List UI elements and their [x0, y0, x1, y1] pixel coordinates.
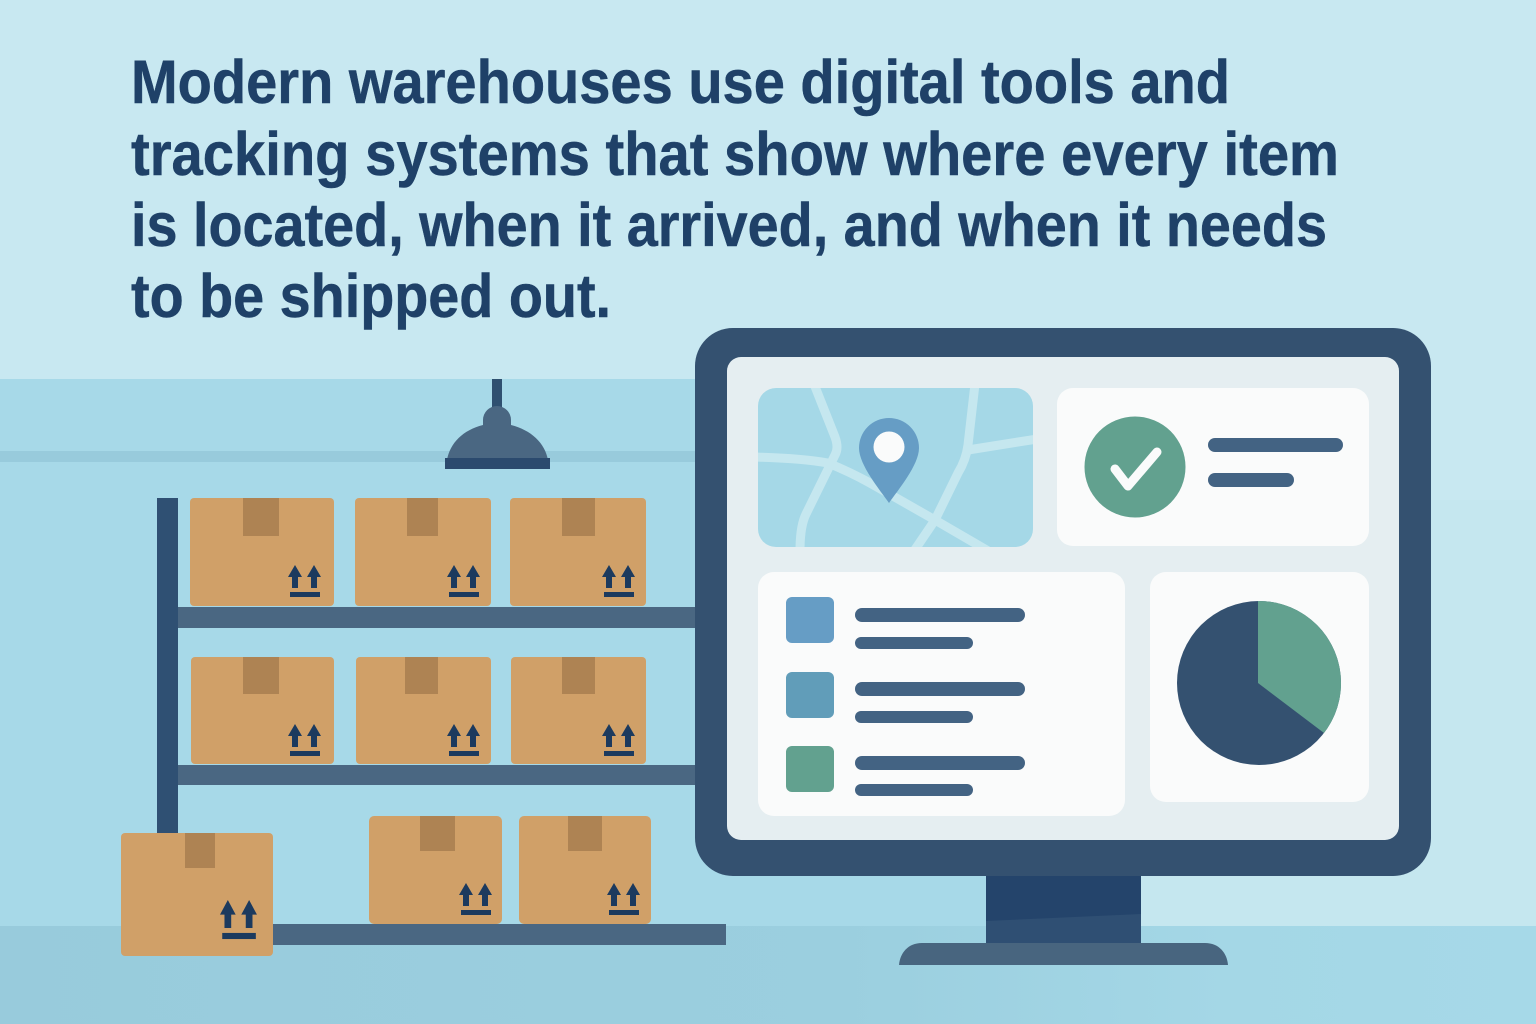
icon: check mark [1084, 416, 1186, 518]
icon: ceiling lamp [445, 379, 550, 469]
status lines [1208, 438, 1343, 487]
title: is located, when it arrived, and when it needs [131, 191, 1327, 259]
monitor stand [899, 874, 1228, 965]
box row 3, box 1 [369, 816, 502, 924]
list row 3 [786, 746, 1025, 796]
box row 2, box 1 [191, 657, 334, 764]
title: Modern warehouses use digital tools and [131, 48, 1230, 116]
list row 1 [786, 597, 1025, 649]
monitor [695, 328, 1431, 876]
box row 2, box 2 [356, 657, 491, 764]
box row 1, box 2 [355, 498, 491, 606]
title: tracking systems that show where every item [131, 120, 1339, 188]
title [131, 48, 1339, 330]
list row 2 [786, 672, 1025, 723]
inventory list card [758, 572, 1125, 816]
box row 2, box 3 [511, 657, 646, 764]
box row 1, box 1 [190, 498, 334, 606]
map panel [754, 384, 1037, 552]
status card [1057, 388, 1369, 546]
box row 1, box 3 [510, 498, 646, 606]
box row 3, box 2 [519, 816, 651, 924]
title: to be shipped out. [131, 262, 611, 330]
pie chart [1177, 601, 1341, 765]
floor box, large [121, 833, 273, 956]
shelving unit [157, 498, 726, 945]
icon: location pin [859, 418, 919, 503]
pie chart card [1150, 572, 1369, 802]
